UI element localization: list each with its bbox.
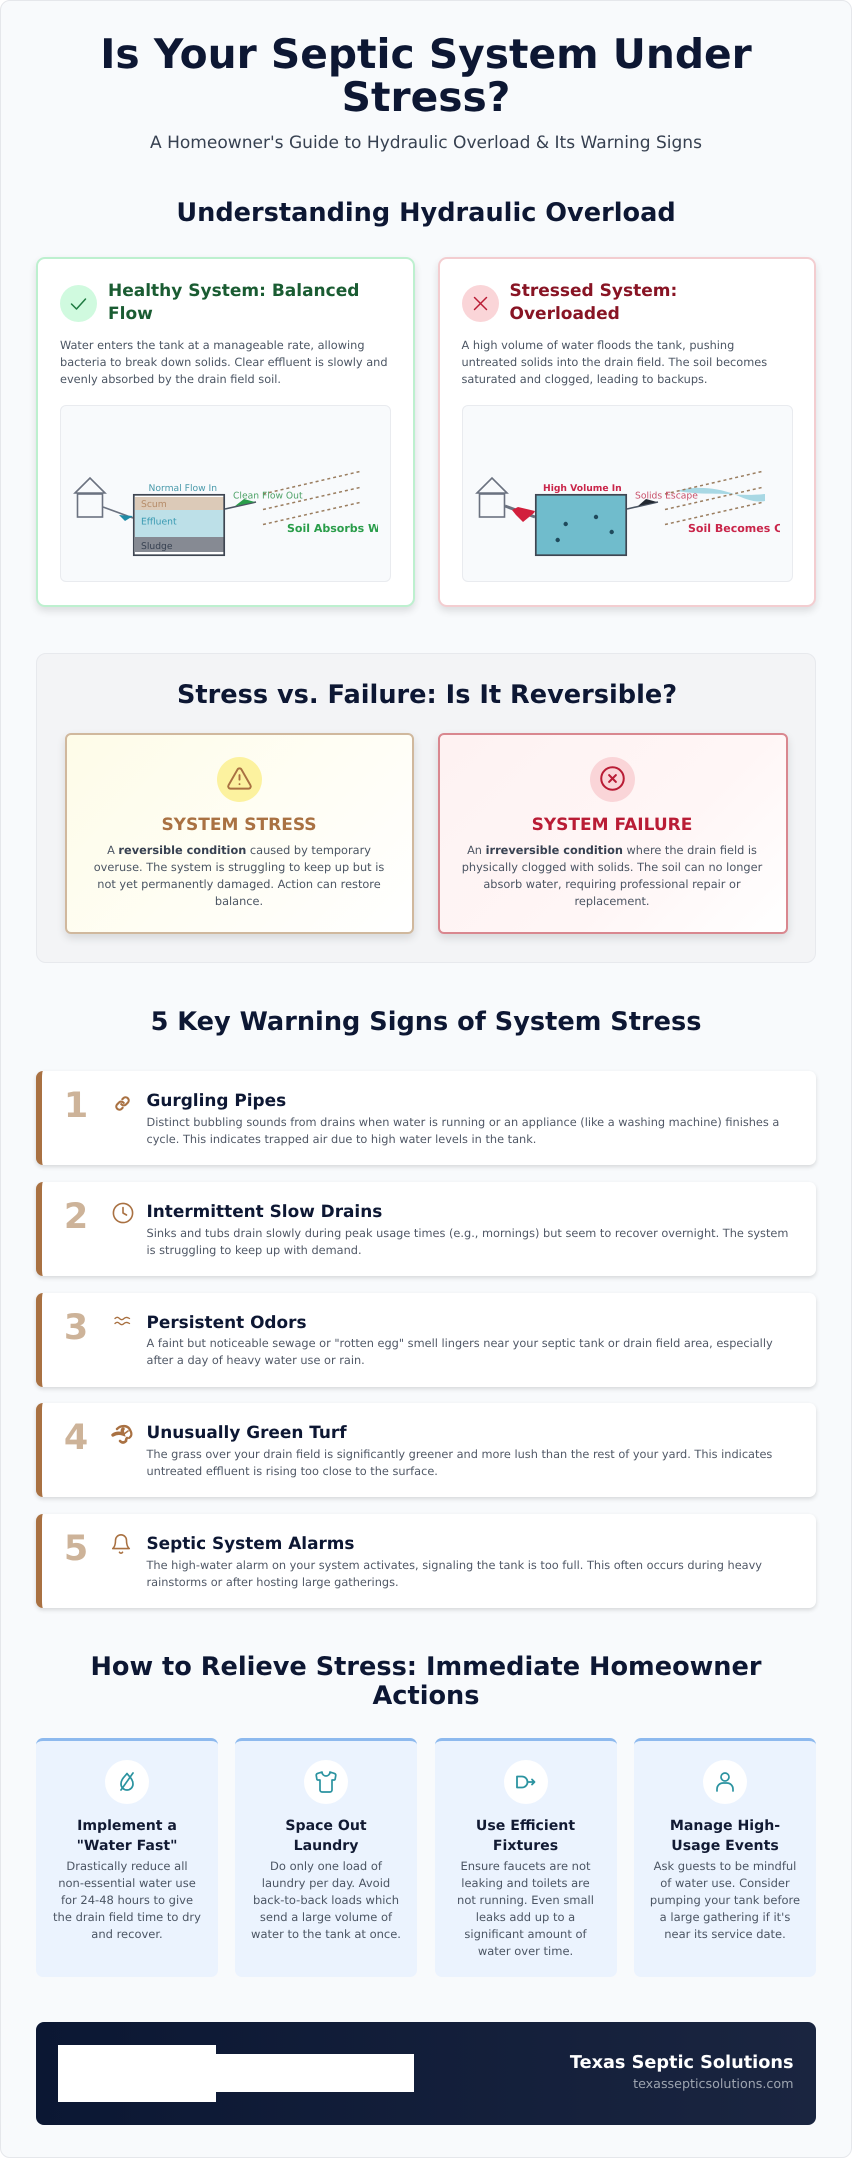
icon: x (462, 285, 498, 322)
number 5: 5 (64, 1529, 88, 1569)
icon: house (75, 478, 105, 517)
text: water fast description: for 24-48 hours to give (61, 1892, 193, 1906)
text: turf description: The grass over your drain field is significantly greener and more lush than the rest of your yard. This indicates (146, 1446, 772, 1460)
flooded tank with solids (535, 495, 626, 555)
heading: stress vs failure: Stress vs. Failure: Is It Reversible? (177, 680, 677, 710)
text: stressed description: saturated and clogged, leading to backups. (462, 372, 708, 386)
heading: gurgling pipes: Gurgling Pipes (146, 1090, 286, 1110)
text: odors description: after a day of heavy water use or rain. (146, 1353, 365, 1367)
text: stressed description: A high volume of water floods the tank, pushing (462, 338, 734, 352)
number 3: 3 (64, 1308, 88, 1348)
icon: turf (111, 1424, 132, 1444)
heading: laundry: Laundry (294, 1838, 358, 1854)
text: healthy description: Water enters the tank at a manageable rate, allowing (60, 338, 365, 352)
text: laundry description: send a large volume of (260, 1910, 392, 1924)
heading: laundry: Space Out (285, 1818, 367, 1834)
text: fixtures description (457, 1858, 594, 1958)
drain field lines (263, 471, 362, 524)
card: system stress (64, 733, 414, 934)
heading: system stress: SYSTEM STRESS (161, 815, 317, 835)
diagram: overloaded septic flow (462, 405, 792, 582)
text: water fast description: Drastically reduce all (66, 1858, 188, 1872)
heading: healthy system (108, 281, 359, 324)
text: odors description: A faint but noticeable sewage or "rotten egg" smell lingers near your septic tank or drain field area, especially (146, 1336, 773, 1350)
heading: how to relieve stress: How to Relieve Stress: Immediate Homeowner (90, 1652, 762, 1682)
action card: events (634, 1738, 816, 1977)
action card: water fast (36, 1738, 218, 1977)
heading: healthy system: Flow (108, 304, 153, 324)
text: fixtures description: not running. Even small (457, 1892, 594, 1906)
text: fixtures description: significant amount of (464, 1926, 587, 1940)
text: fixtures description: leaks add up to a (476, 1910, 575, 1924)
icon: shirt (304, 1760, 348, 1804)
heading: stressed system (510, 281, 677, 324)
heading: green turf: Unusually Green Turf (146, 1422, 347, 1442)
text: gurgling description: cycle. This indicates trapped air due to high water levels in the tank. (146, 1132, 536, 1146)
heading: water fast: Implement a (77, 1818, 177, 1834)
title: Is Your Septic System Under (100, 30, 752, 78)
text: failure description: physically clogged with solids. The soil can no longer (462, 860, 762, 874)
heading: how to relieve stress: Actions (372, 1681, 480, 1711)
text: events description: of water use. Consider (660, 1876, 790, 1890)
warning sign 1 (36, 1071, 816, 1165)
heading: stressed system: Stressed System: (510, 281, 677, 301)
text: fixtures description: water over time. (478, 1944, 573, 1958)
text: laundry description: water to the tank at once. (251, 1926, 401, 1940)
number 4: 4 (64, 1418, 88, 1458)
text: odors description (146, 1336, 773, 1367)
escaping water (676, 488, 764, 502)
title (100, 30, 752, 121)
subtitle: A Homeowner's Guide to Hydraulic Overload & Its Warning Signs (150, 133, 702, 153)
text: stress description: overuse. The system is struggling to keep up but is (94, 860, 384, 874)
text: alarms description: The high-water alarm on your system activates, signaling the tank is too full. This often occurs during heavy (146, 1558, 762, 1572)
text: failure description: An irreversible condition where the drain field is (467, 842, 757, 856)
text: healthy description: evenly absorbed by the drain field soil. (60, 372, 281, 386)
diagram: healthy septic flow (60, 405, 391, 582)
icon: fixture arrow (504, 1760, 548, 1804)
action card: fixtures (434, 1738, 616, 1977)
icon: bell (112, 1534, 130, 1554)
heading: system failure: SYSTEM FAILURE (532, 815, 692, 835)
heading: fixtures (476, 1818, 575, 1854)
text: events description: pumping your tank before (650, 1892, 800, 1906)
septic tank with layers (133, 494, 225, 556)
panel: healthy system (36, 257, 414, 607)
heading: water fast: "Water Fast" (77, 1838, 177, 1854)
text: water fast description: non-essential water use (58, 1876, 196, 1890)
text: water fast description (53, 1858, 201, 1940)
text: laundry description: laundry per day. Avoid (262, 1876, 390, 1890)
heading: events: Usage Events (671, 1838, 779, 1854)
icon: waves (114, 1316, 130, 1326)
title: Stress? (342, 73, 510, 121)
tank labels: High Volume In (542, 483, 621, 494)
text: alarms description: rainstorms or after hosting large gatherings. (146, 1574, 399, 1588)
tank labels (141, 483, 303, 552)
logo placeholder (58, 2045, 414, 2102)
tank labels: Effluent (141, 516, 177, 528)
text: water fast description: the drain field time to dry (53, 1910, 201, 1924)
card: system failure (438, 733, 788, 934)
warning sign 5 (36, 1514, 816, 1608)
panel: stress vs failure (36, 653, 816, 963)
heading: slow drains: Intermittent Slow Drains (146, 1201, 382, 1221)
heading: stressed system: Overloaded (510, 304, 620, 324)
text: healthy description (60, 338, 388, 386)
heading: laundry (285, 1818, 367, 1854)
action card: laundry (235, 1738, 417, 1977)
heading: how to relieve stress (90, 1652, 762, 1711)
text: events description: a large gathering if it's (660, 1910, 790, 1924)
warning sign 4 (36, 1403, 816, 1497)
pipe out with arrow (626, 499, 658, 509)
warning sign 2 (36, 1182, 816, 1276)
text: slow drains description: is struggling to keep up with demand. (146, 1242, 362, 1256)
text: slow drains description: Sinks and tubs drain slowly during peak usage times (e.g., mornings) but seem to recover overnight. The system (146, 1226, 788, 1240)
heading: persistent odors: Persistent Odors (146, 1312, 307, 1332)
heading: healthy system: Healthy System: Balanced (108, 281, 359, 301)
warning sign 3 (36, 1292, 816, 1386)
tank labels: Normal Flow In (148, 483, 217, 494)
text: events description (650, 1858, 800, 1940)
heading: fixtures: Use Efficient (476, 1818, 575, 1834)
text: laundry description: Do only one load of (270, 1858, 382, 1872)
icon: house (476, 478, 506, 517)
heading: warning signs: 5 Key Warning Signs of System Stress (151, 1007, 701, 1037)
heading: events (670, 1818, 780, 1854)
tank labels: Solids Escape (634, 490, 698, 502)
thick pipe in with arrow (504, 506, 534, 522)
tank labels: Sludge (141, 541, 173, 552)
text: stressed description (462, 338, 767, 386)
text: stress description: balance. (215, 894, 263, 908)
number 1: 1 (64, 1086, 88, 1126)
panel: stressed system (438, 257, 816, 607)
icon: warning triangle (217, 756, 262, 802)
text: turf description: untreated effluent is rising too close to the surface. (146, 1464, 438, 1478)
text: events description: Ask guests to be mindful (654, 1858, 796, 1872)
text: stress description: A reversible condition caused by temporary (107, 842, 371, 856)
icon: clock (112, 1202, 134, 1224)
text: laundry description (251, 1858, 401, 1940)
text: stressed description: untreated solids into the drain field. The soil becomes (462, 354, 767, 368)
pipe out with arrow (225, 499, 256, 509)
number 2: 2 (64, 1197, 88, 1237)
website: texassepticsolutions.com (633, 2076, 794, 2091)
heading: fixtures: Fixtures (493, 1838, 558, 1854)
icon: check (60, 285, 97, 322)
text: events description: near its service date. (664, 1926, 786, 1940)
tank labels: Clean Flow Out (233, 490, 303, 502)
heading: understanding hydraulic overload: Understanding Hydraulic Overload (176, 198, 676, 228)
text: failure description: absorb water, requiring professional repair or (483, 876, 741, 890)
text: water fast description: and recover. (91, 1926, 163, 1940)
footer (36, 2022, 816, 2125)
text: alarms description (146, 1558, 762, 1588)
heading: alarms: Septic System Alarms (146, 1533, 354, 1553)
text: stress description (94, 842, 384, 908)
heading: water fast (77, 1818, 177, 1854)
heading: events: Manage High- (670, 1818, 780, 1834)
drain field lines (664, 471, 764, 524)
tank labels: Scum (141, 499, 167, 510)
icon: circle x (590, 756, 635, 802)
text: fixtures description: leaking and toilets are (461, 1876, 590, 1890)
text: stress description: not yet permanently damaged. Action can restore (97, 876, 381, 890)
icon: droplet off (105, 1760, 149, 1804)
text: gurgling description: Distinct bubbling sounds from drains when water is running or an appliance (like a washing machine) finishes a (146, 1114, 779, 1128)
pipe in with arrow (103, 507, 133, 521)
text: turf description (146, 1446, 772, 1478)
text: laundry description: back-to-back loads which (253, 1892, 399, 1906)
text: failure description: replacement. (574, 894, 650, 908)
text: healthy description: bacteria to break down solids. Clear effluent is slowly and (60, 354, 388, 368)
text: fixtures description: Ensure faucets are not (460, 1858, 591, 1872)
icon: user (703, 1760, 747, 1804)
icon: link (115, 1096, 130, 1111)
company name: Texas Septic Solutions (570, 2053, 794, 2073)
text: slow drains description (146, 1226, 788, 1256)
tank labels (542, 483, 698, 502)
text: failure description (462, 842, 762, 908)
text: gurgling description (146, 1114, 779, 1146)
